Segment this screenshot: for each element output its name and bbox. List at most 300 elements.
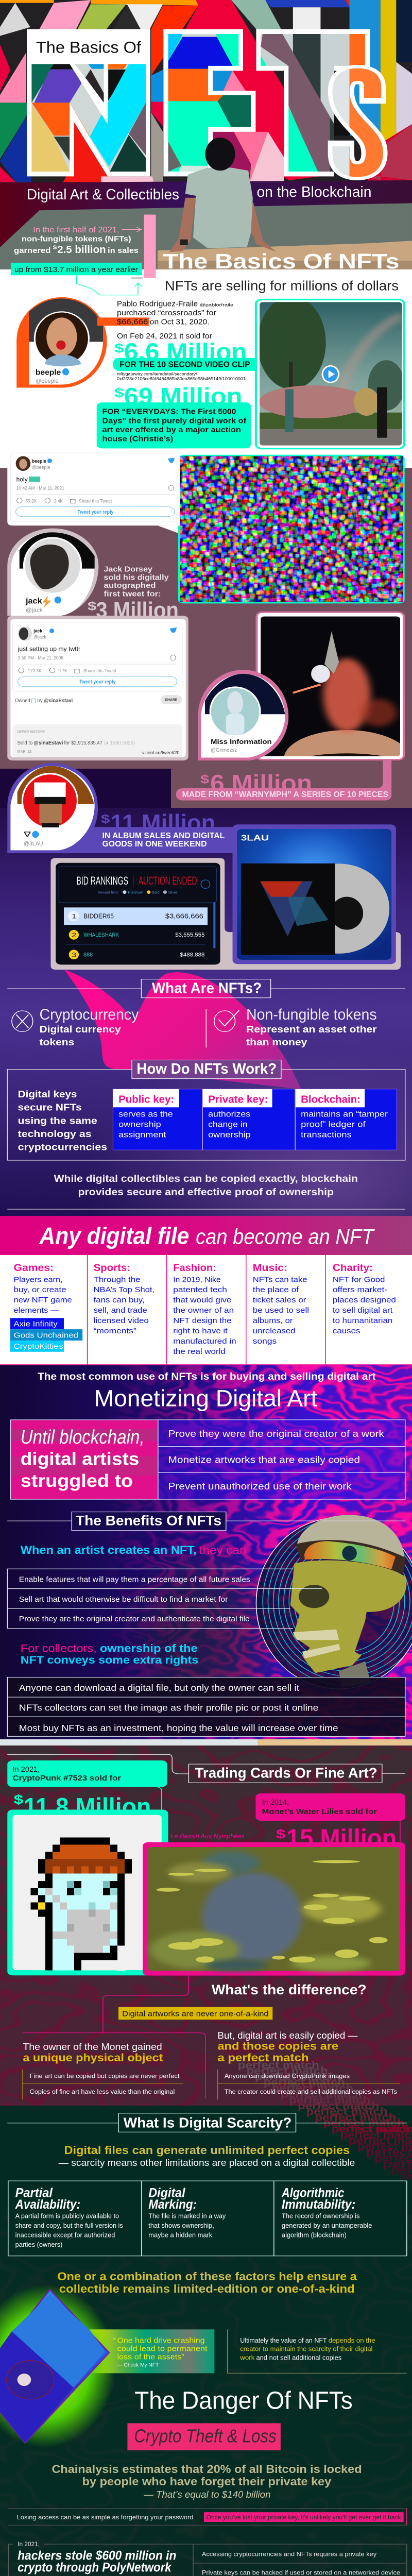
quote box: — Check My NFT xyxy=(117,2362,159,2368)
stat: first half of 2021 sales: in sales xyxy=(108,246,139,255)
bid rows: $3,666,666 xyxy=(165,913,203,920)
ghost repeated perfect match text continued: perfect xyxy=(366,2147,412,2158)
stat: 69 million: art ever offered by a major auction xyxy=(102,426,241,434)
text: crossroads purchase: On Feb 24, 2021 it sold for xyxy=(117,332,212,340)
table: scarcity factors: Immutability: xyxy=(282,2197,355,2212)
jack tweet card: @jack xyxy=(33,635,46,640)
stat: 6.6 million xyxy=(113,338,256,371)
panel: how do NFTs work: change in xyxy=(208,1120,248,1129)
ghost repeated perfect match text: perfect match xyxy=(247,2065,328,2077)
column: charity: Charity: xyxy=(333,1262,373,1273)
pale frame around auction and album xyxy=(50,858,401,970)
caption: le bassin aux nympheas: Le Bassin Aux Nymphéas xyxy=(171,1833,244,1840)
table: scarcity factors: Marking: xyxy=(148,2197,197,2212)
table: artists struggled to: Monetize artworks that are easily copied xyxy=(168,1454,360,1465)
table: scarcity factors xyxy=(8,2181,407,2256)
comparison: cryptocurrency: Cryptocurrency xyxy=(40,1006,139,1023)
bid rows: BIDDER65 xyxy=(83,913,114,920)
note: value depends on creator: and not sell additional copies xyxy=(256,2354,342,2362)
quote box xyxy=(89,2329,214,2373)
column: games: Games: xyxy=(14,1262,54,1273)
statement: combination of factors xyxy=(57,2270,357,2295)
table: artists struggled to: digital artists xyxy=(21,1449,139,1469)
panel: cryptopunk price: In 2021, xyxy=(12,1766,40,1774)
column: music: be used to sell xyxy=(253,1306,309,1314)
jack tweet card: (♦ 1630.5826) xyxy=(105,740,135,745)
panel: how do NFTs work: Digital keys xyxy=(18,1089,77,1099)
column: music: unreleased xyxy=(253,1327,295,1335)
stat: 6.6 million: $ xyxy=(114,341,124,355)
note: value depends on creator: Ultimately the value of an NFT xyxy=(240,2337,327,2344)
column: music: the place of xyxy=(253,1285,299,1294)
jack dorsey text: first tweet for: xyxy=(104,589,161,598)
panel: cryptopunk price: 11.8 Million xyxy=(24,1793,151,1821)
list: collector rights: NFTs collectors can set the image as their profile pic or post it online xyxy=(19,1703,318,1713)
column: charity: causes xyxy=(333,1327,360,1335)
jack tweet card: @sinaEstavi xyxy=(44,698,73,704)
hero: T letter outline xyxy=(256,29,370,176)
hero subtitle left: Digital Art & Collectibles xyxy=(27,187,179,203)
jack tweet card: OFFER HISTORY xyxy=(18,730,45,734)
purple caption bar xyxy=(7,827,234,853)
jack dorsey text: Jack Dorsey xyxy=(104,565,152,573)
column: digital art easily copied: a perfect match xyxy=(217,2052,308,2064)
column: digital art easily copied: Anyone can download CryptoPunk images xyxy=(225,2073,350,2080)
stat: 69 million: house (Christie’s) xyxy=(102,434,173,443)
jack tweet card: Share this Tweet xyxy=(83,668,116,673)
jack dorsey text xyxy=(104,565,169,598)
statement: chainalysis xyxy=(52,2463,362,2500)
section background: mauve xyxy=(0,468,412,808)
illustration: hard drive xyxy=(0,2285,115,2448)
table: artists struggled to: struggled to xyxy=(21,1470,133,1491)
album artwork xyxy=(233,824,396,964)
panel: how do NFTs work: proof” ledger of xyxy=(301,1120,366,1129)
banner: any digital file: Any digital file xyxy=(39,1223,189,1249)
column: music: NFTs can take xyxy=(253,1275,307,1284)
grimes artwork frame xyxy=(255,611,405,760)
grimes profile badge: Miss Information xyxy=(211,738,272,746)
heading: for collectors: For collectors, xyxy=(21,1642,97,1655)
heading: the benefits of NFTs: The Benefits Of NFTs xyxy=(76,1513,221,1528)
comparison: non-fungible tokens: than money xyxy=(246,1037,307,1047)
column: games xyxy=(10,1262,82,1352)
table: scarcity factors: The file is marked in a way xyxy=(148,2213,226,2220)
text: crossroads purchase: @pablorfraile xyxy=(200,303,234,308)
panel: how do NFTs work: Blockchain: xyxy=(301,1094,360,1106)
purple caption bar: GOODS IN ONE WEEKEND xyxy=(102,839,207,849)
column: games: Players earn, xyxy=(14,1275,62,1284)
section background: marble strip xyxy=(0,1739,412,1745)
stat: 11 million: 11 Million xyxy=(110,810,215,836)
jack tweet card xyxy=(7,616,188,760)
ghost repeated perfect match text continued: perf xyxy=(383,2158,412,2170)
section background: marble dark blue xyxy=(0,1365,412,1739)
hero title prefix: The Basics Of xyxy=(36,38,141,56)
table: scarcity factors: maybe a hidden mark xyxy=(148,2232,212,2239)
bid rankings panel xyxy=(56,863,220,964)
section background: brown streaked xyxy=(0,1745,412,2106)
panel: how do NFTs work: Private key: xyxy=(208,1094,268,1106)
stat: 6.6 million: FOR THE 10 SECOND VIDEO CLIP xyxy=(119,360,250,369)
white section cap xyxy=(0,269,412,304)
panel: digital file types xyxy=(0,1255,412,1365)
bid rows: 1 xyxy=(72,913,76,920)
panel: monet price caption: Monet’s Water Lilies sold for xyxy=(262,1807,377,1816)
column: games: CryptoKitties xyxy=(14,1342,63,1350)
jack tweet card: by xyxy=(37,698,43,704)
divider xyxy=(205,1009,207,1047)
column: sports: licensed video xyxy=(94,1316,149,1325)
stat: first half of 2021 sales: 2.5 billion xyxy=(57,244,106,256)
jack tweet card: Tweet your reply xyxy=(79,679,116,685)
panel: how do NFTs work: secure NFTs xyxy=(18,1102,82,1113)
bid rankings panel: Reward tiers: xyxy=(98,890,119,894)
panel: how do NFTs work: authorizes xyxy=(208,1109,250,1118)
column: fashion: the owner of an xyxy=(173,1306,234,1314)
text: crossroads purchase xyxy=(117,300,234,340)
stat: 6 million: 6 Million xyxy=(210,770,312,796)
bid rows: $3,555,555 xyxy=(175,931,204,938)
comparison: cryptocurrency xyxy=(12,1006,139,1047)
table: scarcity factors: inaccessible except for authorized xyxy=(15,2232,115,2239)
banner: crypto theft and loss: Crypto Theft & Loss xyxy=(134,2426,277,2447)
section background: white intro xyxy=(0,269,412,470)
stat: 6.6 million: 6.6 Million xyxy=(124,338,247,365)
column: fashion: patented tech xyxy=(173,1285,227,1294)
table: scarcity factors: share and copy, but the full version is xyxy=(15,2222,123,2230)
stat: 69 million: $ xyxy=(114,386,124,400)
list: artist benefits: Enable features that will pay them a percentage of all future sales xyxy=(19,1575,250,1584)
hero: dark band and lower wall xyxy=(0,180,412,269)
jack tweet card: just setting up my twttr xyxy=(18,646,80,653)
panel: how do NFTs work: ownership xyxy=(118,1120,161,1129)
beeple profile badge: beeple xyxy=(36,368,61,377)
note: value depends on creator xyxy=(228,2329,407,2373)
stat: 11 million: $ xyxy=(101,812,110,826)
column: games: new NFT game xyxy=(14,1296,72,1304)
column: music: Music: xyxy=(253,1262,287,1273)
column: the owner of the monet: The owner of the Monet gained xyxy=(23,2042,162,2052)
stat: first half of 2021 sales: In the first half of 2021, xyxy=(33,225,119,234)
video still frame xyxy=(256,296,405,449)
source url: 0xl2f28e2106ce8fd8464885b80ea865e98b465149/100010001 xyxy=(117,377,246,381)
text: crossroads purchase: Pablo Rodríguez-Fraile xyxy=(117,300,198,308)
arrow: callout to bar xyxy=(76,275,141,295)
stat: 15 million: $ xyxy=(276,1827,286,1841)
bid rankings panel: Platinum xyxy=(128,890,143,894)
source url: niftygateway.com/itemdetail/secondary/ xyxy=(117,372,197,377)
table: artists struggled to: Prevent unauthorized use of their work xyxy=(168,1481,352,1492)
column: charity xyxy=(333,1262,396,1335)
illustration: skull in striped oval xyxy=(256,1515,412,1689)
text: crossroads purchase: on Oct 31, 2020. xyxy=(150,318,210,326)
stat: 3 million: $ xyxy=(88,600,97,613)
comparison: non-fungible tokens: Represent an asset other xyxy=(246,1024,377,1035)
beeple tweet card: 10:42 AM - Mar 11, 2021 xyxy=(16,486,64,491)
hero: person seen from behind xyxy=(169,138,276,252)
3LAU profile badge xyxy=(7,763,98,853)
note: value depends on creator: work xyxy=(239,2354,255,2362)
jack tweet card: Sold to xyxy=(18,740,32,745)
stat: 11 million xyxy=(101,810,215,836)
column: charity: NFT for Good xyxy=(333,1275,385,1284)
cryptopunk frame xyxy=(7,1810,168,1975)
column: fashion: manufactured in xyxy=(173,1337,236,1345)
beeple profile badge: @beeple xyxy=(36,378,59,384)
panel: how do NFTs work: transactions xyxy=(301,1130,352,1139)
panel: how do NFTs work: How Do NFTs Work? xyxy=(136,1061,277,1077)
column: sports: NBA’s Top Shot, xyxy=(94,1285,154,1294)
column: charity: places designed xyxy=(333,1296,396,1304)
jack tweet card: @sinaEstavi xyxy=(33,740,63,745)
panel: polynetwork hack: crypto through PolyNetwork xyxy=(18,2561,172,2575)
ghost repeated perfect match text: perfect match xyxy=(238,2059,319,2071)
ghost repeated perfect match text: perfect match xyxy=(306,2106,388,2117)
comparison: cryptocurrency: Digital currency xyxy=(40,1024,121,1035)
panel: monet price caption xyxy=(255,1793,405,1821)
column: fashion: the real world xyxy=(173,1347,226,1355)
jack dorsey text: autographed xyxy=(104,581,156,590)
stat: first half of 2021 sales: $ xyxy=(53,244,57,250)
table: scarcity factors: parties (owners) xyxy=(15,2241,62,2248)
column: games: elements — xyxy=(14,1306,59,1314)
heading: for collectors xyxy=(21,1642,198,1666)
jack handle: @jack xyxy=(26,606,43,613)
list: collector rights xyxy=(7,1677,405,1736)
hero: N letter outline xyxy=(27,29,150,176)
heading: what is digital scarcity: What Is Digital Scarcity? xyxy=(124,2115,291,2131)
column: sports: Sports: xyxy=(94,1262,130,1273)
column: the owner of the monet xyxy=(23,2042,183,2099)
table: scarcity factors: A partial form is publicly available to xyxy=(15,2213,119,2220)
connector to mosaic xyxy=(178,448,263,459)
grimes profile badge: @Grimezsz xyxy=(211,747,237,753)
stat: first half of 2021 sales: garnered xyxy=(14,246,50,255)
column: sports: Through the xyxy=(94,1275,140,1284)
row: losing access xyxy=(8,2509,407,2525)
pink blob xyxy=(64,970,301,1089)
panel: how do NFTs work: cryptocurrencies xyxy=(18,1142,107,1153)
stat: first half of 2021 sales xyxy=(14,225,141,256)
column: games: buy, or create xyxy=(14,1285,66,1294)
hero: S letter outline xyxy=(334,75,374,171)
column: sports: fans can buy, xyxy=(94,1296,145,1304)
summary statement: provides secure and effective proof of ownership xyxy=(78,1186,334,1197)
panel: cryptopunk price: $ xyxy=(14,1792,24,1807)
jack tweet card: 3:50 PM - Mar 21, 2006 xyxy=(18,656,63,661)
table: scarcity factors: Digital xyxy=(148,2186,185,2200)
stat: 69 million: 69 Million xyxy=(124,383,242,410)
beeple tweet card: 2.4K xyxy=(54,499,63,504)
column: sports: “moments” xyxy=(94,1327,136,1335)
grimes profile badge xyxy=(198,670,288,760)
ghost repeated perfect match text: perfect match xyxy=(281,2089,362,2100)
column: digital art easily copied xyxy=(217,2030,400,2099)
list: artist benefits: Prove they are the original creator and authenticate the digital file xyxy=(19,1615,250,1623)
table: artists struggled to: Until blockchain, xyxy=(21,1427,145,1448)
flow line xyxy=(23,1976,205,2098)
column: fashion: In 2019, Nike xyxy=(173,1275,221,1284)
jack tweet card: v.cent.co/tweet/20 xyxy=(142,751,179,756)
hero: F letter outline xyxy=(163,29,255,176)
quote box: One hard drive crashing xyxy=(117,2336,204,2345)
bid rows: $488,888 xyxy=(180,951,204,958)
quote box: “ xyxy=(112,2336,116,2345)
column: music: albums, or xyxy=(253,1316,293,1325)
connector: orange highlight xyxy=(97,317,149,326)
panel: monet price caption: In 2014, xyxy=(262,1799,289,1806)
panel: polynetwork hack: In 2021, xyxy=(18,2541,40,2548)
column: the owner of the monet: a unique physical object xyxy=(23,2052,163,2064)
row: losing access: Losing access can be as simple as forgetting your password xyxy=(17,2514,194,2521)
bid rows: 3 xyxy=(72,952,76,959)
column: charity: to sell digital art xyxy=(333,1306,392,1314)
column: sports: sell, and trade xyxy=(94,1306,147,1314)
3LAU profile badge: ∇ xyxy=(23,831,31,838)
ghost repeated perfect match text: perfect match xyxy=(255,2071,336,2082)
jack profile badge: jack xyxy=(25,596,42,605)
stat: 69 million: Days" the first purely digital work of xyxy=(102,416,246,425)
panel: cryptopunk price: CryptoPunk #7523 sold for xyxy=(12,1774,121,1782)
banner: any digital file xyxy=(0,1216,412,1255)
column: sports xyxy=(94,1262,154,1335)
column: charity: offers market- xyxy=(333,1285,387,1294)
list: collector rights: Anyone can download a digital file, but only the owner can sell it xyxy=(19,1683,299,1693)
column: music xyxy=(253,1262,309,1345)
column: the owner of the monet: Copies of fine art have less value than the original xyxy=(30,2089,175,2095)
column: music: ticket sales or xyxy=(253,1296,306,1304)
heading: for collectors: ownership of the xyxy=(100,1642,198,1655)
bid rows: 888 xyxy=(83,951,93,958)
bid rows: 2 xyxy=(72,932,76,939)
stat: 3 million: 3 Million xyxy=(96,598,179,623)
panel: how do NFTs work: technology as xyxy=(18,1128,92,1139)
stat: first half of 2021 sales: non-fungible tokens (NFTs) xyxy=(22,234,131,243)
text: crossroads purchase: $66,666 xyxy=(117,318,148,326)
column: fashion: that would give xyxy=(173,1296,232,1304)
table: scarcity factors: Algorithmic xyxy=(281,2186,345,2200)
tag: never one of a kind: Digital artworks are never one-of-a-kind xyxy=(122,2009,268,2018)
comparison: cryptocurrency: tokens xyxy=(40,1037,74,1047)
note: value depends on creator: depends on the xyxy=(329,2337,375,2344)
comparison: non-fungible tokens xyxy=(214,1006,377,1047)
bid rankings panel: Silver xyxy=(168,890,177,894)
3LAU profile badge: @3LAU xyxy=(24,840,43,846)
table: scarcity factors: that shows ownership, xyxy=(148,2222,214,2230)
table: artists struggled to xyxy=(10,1420,405,1499)
panel: polynetwork hack: hackers stole $600 million in xyxy=(18,2549,176,2563)
column: fashion: right to have it xyxy=(173,1327,228,1335)
heading: what are NFTs xyxy=(7,979,405,998)
bid rows xyxy=(64,902,215,959)
hero subtitle right: on the Blockchain xyxy=(256,184,371,200)
beeple tweet card: Share this Tweet xyxy=(79,499,112,504)
bid rankings panel: BID RANKINGS xyxy=(76,874,128,887)
list: collector rights: Most buy NFTs as an investment, hoping the value will increase over time xyxy=(19,1723,338,1733)
jack tweet card: jack xyxy=(33,629,42,634)
banner: crypto theft and loss xyxy=(127,2423,281,2450)
table: scarcity factors: generated by an untamperable xyxy=(282,2222,372,2230)
statement: chainalysis: — That’s equal to $140 billion xyxy=(143,2489,271,2500)
heading: for collectors: NFT conveys some extra rights xyxy=(21,1654,198,1666)
ghost repeated perfect match text: perfect match xyxy=(272,2082,353,2094)
stat: 69 million: FOR “EVERYDAYS: The First 5000 xyxy=(102,407,236,416)
heading: what are NFTs: What Are NFTs? xyxy=(152,980,262,996)
pink accent bar xyxy=(144,215,156,278)
panel: polynetwork hack xyxy=(8,2541,407,2576)
column: music: songs xyxy=(253,1337,277,1345)
jack tweet card: SHARE xyxy=(165,698,177,702)
heading: monetizing digital art: Monetizing Digital Art xyxy=(94,1385,317,1412)
jack tweet card: for $2,915,835.47 xyxy=(64,740,102,745)
stat: 6 million xyxy=(176,760,391,801)
jack tweet card: MAR. 22 xyxy=(18,749,31,754)
stat: 69 million xyxy=(97,383,251,448)
table: scarcity factors: Availability: xyxy=(15,2197,80,2212)
ghost repeated perfect match text: perfect match xyxy=(298,2100,379,2112)
heading: what's the difference: What's the difference? xyxy=(212,1982,367,1997)
beeple tweet card: Tweet your reply xyxy=(78,510,114,515)
ghost repeated perfect match text: perfect match xyxy=(289,2094,370,2106)
heading: when an artist creates: When an artist creates an NFT, xyxy=(21,1544,197,1556)
bid rows: WHALESHARK xyxy=(83,931,119,938)
jack tweet card: 9.7K xyxy=(58,668,67,673)
summary statement xyxy=(54,1173,358,1197)
jack tweet card: 170.3K xyxy=(28,668,42,673)
ghost repeated perfect match text: perfect match xyxy=(264,2077,345,2089)
panel: cryptopunk price xyxy=(7,1760,167,1821)
panel: how do NFTs work: maintains an “tamper xyxy=(301,1109,388,1118)
column: the owner of the monet: Fine art can be copied but copies are never perfect xyxy=(30,2073,179,2080)
beeple tweet card: 59.2K xyxy=(25,499,37,504)
heading: trading cards or fine art xyxy=(7,1754,405,1783)
beeple tweet card: holy xyxy=(16,476,28,483)
stat: 6 million: $ xyxy=(200,773,210,786)
statement: chainalysis: by people who have forget their private key xyxy=(82,2475,331,2488)
quote box: could lead to permanent xyxy=(117,2344,208,2353)
column: charity: to humanitarian xyxy=(333,1316,392,1325)
jack tweet card: Owned xyxy=(15,698,30,704)
ghost repeated perfect match text: perfect match xyxy=(315,2112,396,2123)
tag: never one of a kind xyxy=(118,2007,272,2020)
panel: how do NFTs work: serves as the xyxy=(118,1109,173,1118)
section background: dark green xyxy=(0,2106,412,2576)
panel: how do NFTs work xyxy=(7,1060,405,1160)
panel: how do NFTs work: assignment xyxy=(118,1130,166,1139)
table: scarcity factors: The record of ownership is xyxy=(282,2213,360,2220)
album artwork: 3LAU xyxy=(241,833,269,842)
beeple tweet card: beeple xyxy=(32,459,46,464)
beeple tweet card xyxy=(7,452,181,533)
jack dorsey text: sold his digitally xyxy=(104,573,169,582)
column: fashion: Fashion: xyxy=(173,1262,216,1273)
quote box: loss of the assets” xyxy=(117,2352,184,2361)
statement: unlimited perfect copies xyxy=(59,2144,355,2168)
stat: 3 million xyxy=(88,598,179,623)
bid rankings panel: AUCTION ENDED! xyxy=(139,874,199,887)
callout: up from 13.7 million xyxy=(11,263,142,275)
everydays mosaic image xyxy=(180,456,403,602)
text: crossroads purchase: purchased “crossroads” for xyxy=(117,309,216,317)
heading: the benefits of NFTs xyxy=(7,1512,405,1531)
monet painting frame xyxy=(143,1842,405,1976)
column: games: Gods Unchained xyxy=(14,1331,78,1340)
list: artist benefits: Sell art that would otherwise be difficult to find a market for xyxy=(19,1595,228,1603)
ghost repeated perfect match text continued xyxy=(332,2123,412,2181)
everydays mosaic frame xyxy=(178,455,405,603)
bid rankings panel: Gold xyxy=(151,890,160,894)
